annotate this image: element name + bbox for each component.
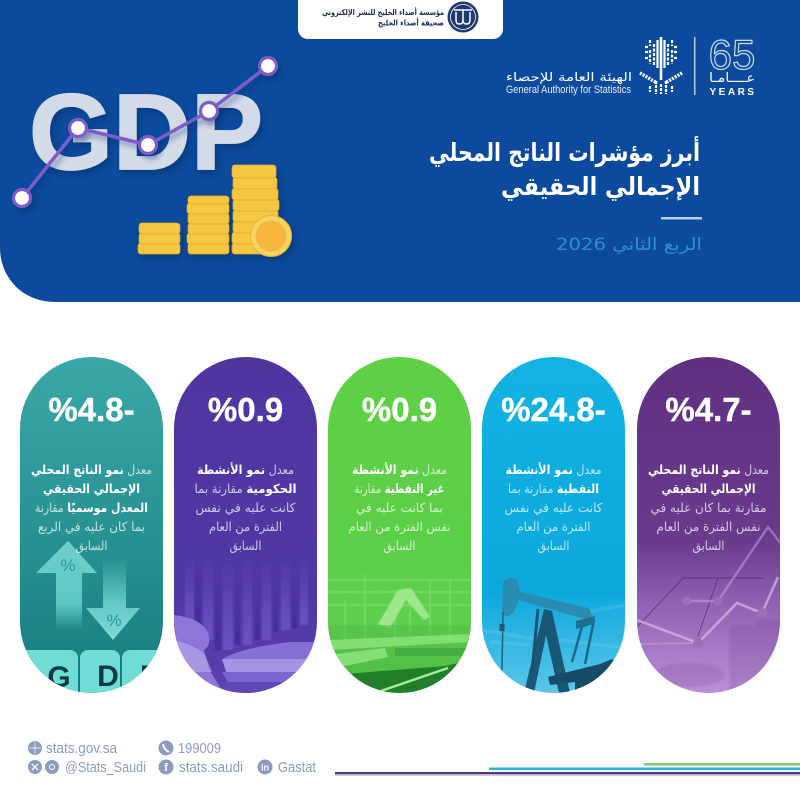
description: بما كانت عليه في (356, 500, 443, 515)
x and instagram: @Stats_Saudi (65, 759, 146, 776)
description (504, 462, 603, 554)
GASTAT emblem (640, 37, 682, 94)
description: النفطية مقارنة بما (508, 481, 599, 497)
65 years badge: 65 (709, 31, 755, 78)
image: percent arrows and GDP tiles: % (60, 556, 76, 575)
footer stripes (335, 763, 800, 776)
image: percent arrows and GDP tiles: G (47, 661, 71, 694)
description: كانت عليه في نفس (196, 500, 296, 516)
publisher logo card (298, 0, 503, 39)
description: الإجمالي الحقيقي (662, 481, 756, 496)
subtitle: quarter: الربع الثاني 2026 (556, 235, 702, 255)
value: %0.9 (362, 391, 437, 428)
description: الفترة من العام (516, 519, 590, 535)
description: الحكومية مقارنة بما (194, 481, 296, 497)
divider: logo (694, 37, 696, 95)
description: بما كان عليه في الربع (38, 519, 145, 535)
coin stacks (138, 165, 292, 256)
footer contacts (28, 740, 317, 776)
linkedin: Gastat (278, 759, 317, 776)
description: السابق (692, 538, 724, 554)
title rule (661, 217, 702, 220)
coin stack medium (187, 196, 229, 254)
title: الإجمالي الحقيقي (501, 172, 700, 201)
phone (158, 740, 221, 757)
GASTAT name (506, 70, 632, 96)
description (348, 462, 450, 554)
value: %24.8- (501, 391, 606, 428)
description: معدل نمو الأنشطة (506, 462, 602, 477)
GDP wordmark: GDP (29, 71, 263, 192)
image: percent arrows and GDP tiles: % (106, 611, 122, 630)
description (194, 462, 296, 554)
65 years badge (709, 31, 756, 98)
description: نفس الفترة من العام (656, 519, 760, 535)
description: نفس الفترة من العام (348, 519, 450, 535)
description: السابق (384, 538, 416, 554)
description (648, 462, 769, 554)
panel: government activities (174, 357, 320, 695)
description: الإجمالي الحقيقي (43, 481, 140, 496)
description: معدل نمو الناتج المحلي (31, 462, 152, 477)
description: مقارنة بما كان عليه في (650, 500, 766, 516)
65 years badge: عــــامـا (709, 71, 755, 86)
value: %0.9 (208, 391, 283, 428)
description (31, 462, 152, 554)
title (429, 136, 700, 201)
publisher name text: مؤسسة أصداء الخليج للنشر الإلكتروني (322, 7, 444, 17)
phone: 199009 (178, 740, 221, 757)
description: السابق (230, 538, 262, 554)
linkedin: in (261, 762, 269, 772)
description: المعدل موسميًا مقارنة (35, 500, 148, 516)
publisher name text (322, 7, 444, 28)
description: معدل نمو الناتج المحلي (648, 462, 769, 477)
facebook: f (164, 762, 168, 774)
panel: non-oil activities (328, 357, 471, 695)
value: %4.8- (48, 391, 135, 428)
linkedin (258, 759, 317, 776)
description: معدل نمو الأنشطة (352, 462, 447, 477)
facebook (158, 759, 243, 776)
coin stack small (138, 223, 180, 254)
value: %4.7- (665, 391, 752, 428)
header banner (0, 0, 800, 302)
image: percent arrows and GDP tiles: P (140, 660, 160, 693)
trend line (14, 58, 276, 206)
image: percent arrows and GDP tiles (26, 541, 157, 693)
panel: seasonally adjusted real GDP (20, 357, 163, 693)
image: robotic factory (328, 575, 471, 695)
description: كانت عليه في نفس (504, 500, 603, 516)
image: percent arrows and GDP tiles: D (97, 660, 119, 693)
65 years badge: YEARS (710, 87, 756, 98)
description: السابق (538, 538, 570, 554)
description: الفترة من العام (209, 519, 282, 535)
description: السابق (76, 538, 108, 554)
image: oil pumpjack (482, 578, 625, 695)
publisher name text: صحيفة أصداء الخليج (378, 18, 444, 28)
description: معدل نمو الأنشطة (197, 462, 294, 477)
single coin (250, 216, 292, 256)
GASTAT name: الهيئة العامة للإحصاء (506, 70, 632, 84)
website: stats.gov.sa (46, 740, 118, 757)
facebook: stats.saudi (179, 759, 243, 776)
panel: real GDP (637, 357, 785, 695)
GASTAT name: General Authority for Statistics (506, 84, 631, 96)
publisher emblem (448, 2, 478, 32)
x and instagram (28, 759, 146, 776)
panel: oil activities (482, 357, 625, 695)
coin stack tall (232, 165, 279, 254)
image: chart lines and coins (637, 527, 785, 695)
description: غير النفطية مقارنة (354, 481, 444, 497)
image: columns (174, 576, 314, 693)
title: أبرز مؤشرات الناتج المحلي (429, 136, 700, 168)
